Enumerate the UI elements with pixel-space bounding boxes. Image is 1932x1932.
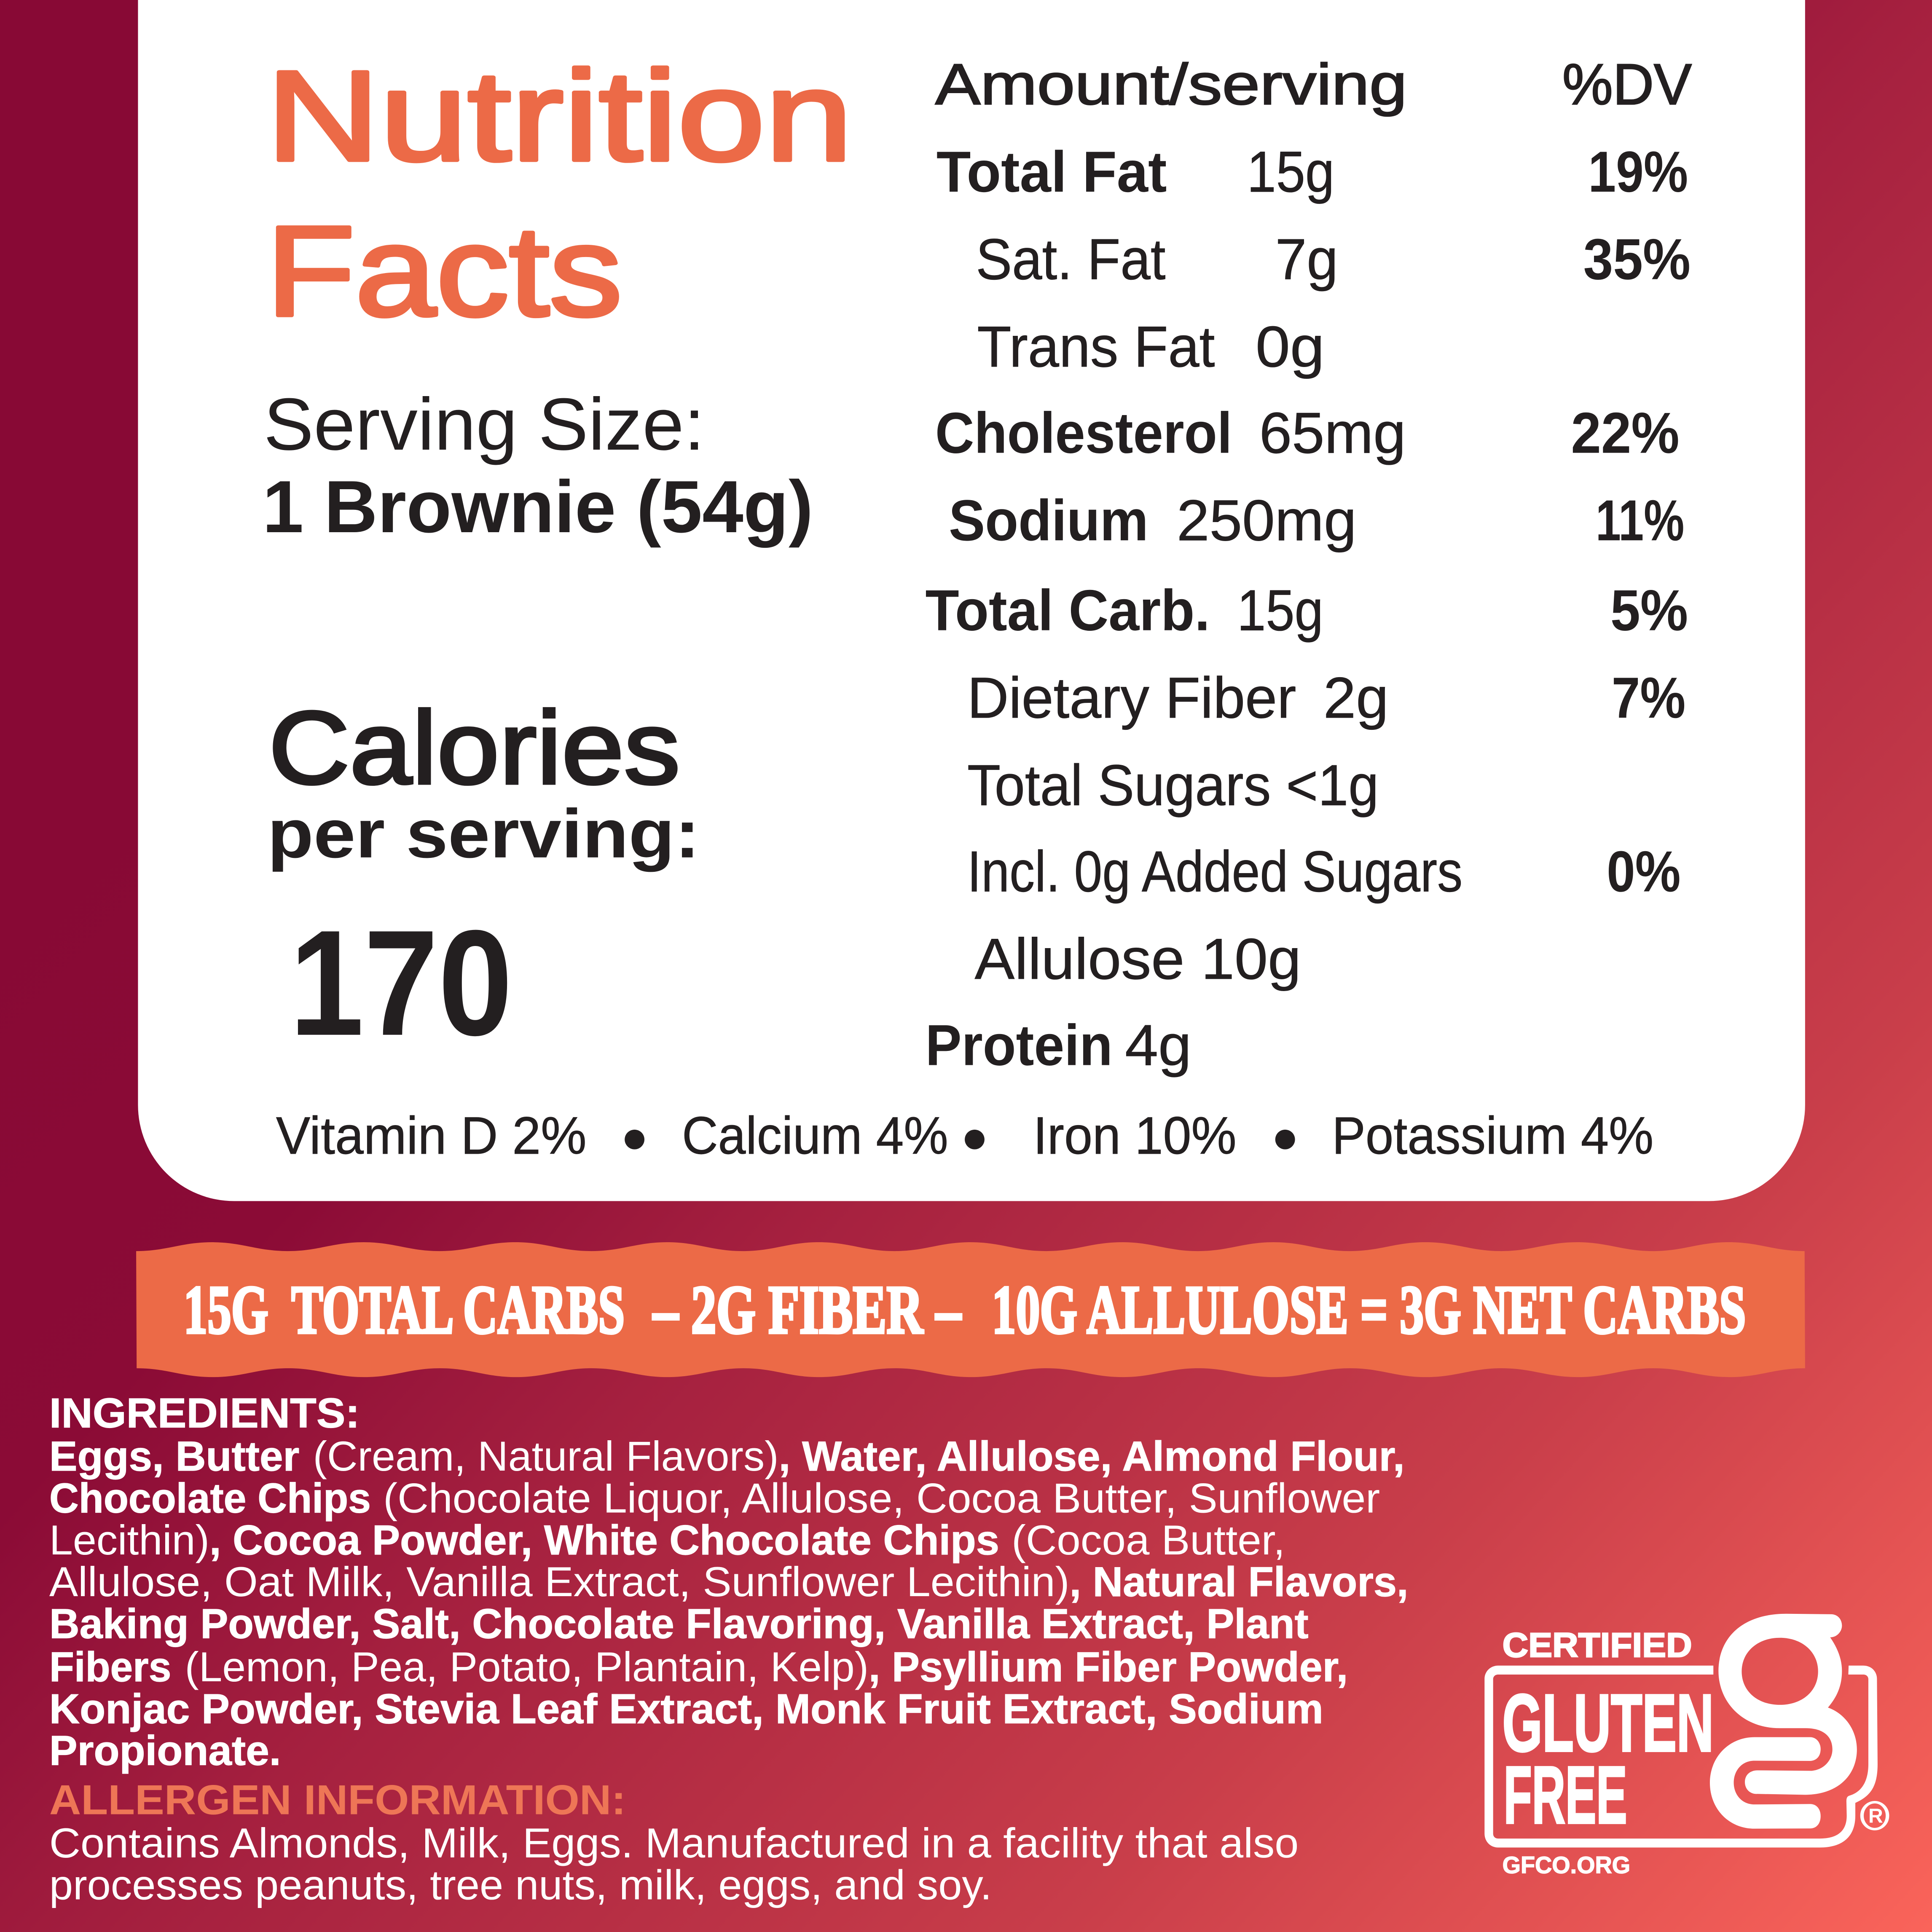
row: saturated fat: 7g bbox=[1275, 227, 1338, 292]
text block: allergen information: Contains Almonds, Milk, Eggs. Manufactured in a facility that also bbox=[49, 1820, 1299, 1867]
panel: nutrition card bbox=[138, 0, 1805, 1201]
text: serving size bbox=[263, 383, 813, 548]
text block: ingredients: Allulose, Oat Milk, Vanilla Extract, Sunflower Lecithin) bbox=[49, 1559, 1070, 1605]
text block: ingredients: INGREDIENTS: bbox=[49, 1390, 360, 1437]
text: vitamins and minerals: Vitamin D 2% bbox=[276, 1106, 587, 1165]
row: sodium bbox=[949, 488, 1684, 553]
row: total fat: Total Fat bbox=[936, 140, 1167, 204]
row: protein: 4g bbox=[1125, 1013, 1191, 1078]
row: allulose: Allulose 10g bbox=[974, 927, 1301, 991]
row: cholesterol: 65mg bbox=[1259, 401, 1406, 466]
row: dietary fiber: 7% bbox=[1612, 666, 1685, 730]
text: calories per serving: per serving: bbox=[267, 795, 700, 872]
icon: certified gluten free logo: CERTIFIED bbox=[1503, 1626, 1692, 1664]
text block: allergen information bbox=[49, 1777, 1299, 1908]
text block: ingredients bbox=[49, 1390, 1409, 1774]
text block: ingredients: , Natural Flavors, bbox=[1070, 1559, 1409, 1605]
text block: ingredients: , Water, Allulose, Almond Flour, bbox=[779, 1433, 1405, 1480]
banner: net carbs bbox=[136, 1242, 1805, 1377]
icon: certified gluten free logo: FREE bbox=[1504, 1750, 1627, 1841]
text: calories per serving bbox=[267, 690, 700, 1067]
text block: ingredients: (Lemon, Pea, Potato, Plantain, Kelp) bbox=[185, 1644, 869, 1691]
row: cholesterol bbox=[935, 401, 1680, 466]
title: Nutrition Facts: Facts bbox=[266, 200, 622, 343]
row: sodium: 250mg bbox=[1177, 488, 1357, 553]
text block: ingredients: Propionate. bbox=[49, 1728, 281, 1774]
text block: ingredients: Lecithin) bbox=[49, 1517, 209, 1564]
text block: allergen information: ALLERGEN INFORMATION: bbox=[49, 1777, 626, 1824]
title: Nutrition Facts: Nutrition bbox=[266, 45, 853, 188]
text block: ingredients: , Cocoa Powder, White Chocolate Chips bbox=[209, 1517, 999, 1564]
row: trans fat: 0g bbox=[1256, 315, 1325, 379]
text block: ingredients: Baking Powder, Salt, Chocolate Flavoring, Vanilla Extract, Plant bbox=[49, 1601, 1309, 1648]
text: serving size: 1 Brownie (54g) bbox=[263, 466, 813, 548]
row: sodium: Sodium bbox=[949, 488, 1148, 553]
row: total fat bbox=[936, 140, 1688, 204]
text block: ingredients: Chocolate Chips bbox=[49, 1475, 371, 1522]
icon: certified gluten free logo: GFCO.ORG bbox=[1503, 1852, 1630, 1878]
text: vitamins and minerals: Potassium 4% bbox=[1332, 1106, 1653, 1165]
row: sodium: 11% bbox=[1596, 488, 1684, 553]
text: calories per serving: Calories bbox=[268, 690, 680, 806]
text: serving size: Serving Size: bbox=[264, 383, 705, 466]
text: vitamins and minerals bbox=[276, 1106, 1653, 1165]
row: trans fat: Trans Fat bbox=[977, 315, 1215, 379]
text: calories per serving: 170 bbox=[290, 899, 513, 1067]
row: header: Amount/serving bbox=[935, 52, 1407, 117]
row: added sugars: 0% bbox=[1607, 839, 1681, 904]
row: saturated fat bbox=[976, 227, 1690, 292]
row: total fat: 15g bbox=[1247, 140, 1334, 204]
title: Nutrition Facts bbox=[266, 45, 853, 343]
row: total carbohydrate bbox=[926, 579, 1688, 643]
icon: certified gluten free logo: R bbox=[1868, 1805, 1883, 1827]
text block: ingredients: (Cocoa Butter, bbox=[1012, 1517, 1285, 1564]
text block: allergen information: processes peanuts, tree nuts, milk, eggs, and soy. bbox=[49, 1862, 992, 1908]
text block: ingredients: Fibers bbox=[49, 1644, 171, 1691]
text block: ingredients: Konjac Powder, Stevia Leaf Extract, Monk Fruit Extract, Sodium bbox=[49, 1685, 1323, 1732]
text: net carbs equation bbox=[184, 1272, 1746, 1348]
text block: ingredients: Eggs, Butter bbox=[49, 1433, 299, 1480]
row: added sugars: Incl. 0g Added Sugars bbox=[967, 839, 1462, 904]
text: net carbs equation: 15G TOTAL CARBS bbox=[184, 1272, 625, 1348]
text block: ingredients: (Chocolate Liquor, Allulose, Cocoa Butter, Sunflower bbox=[383, 1475, 1380, 1522]
text: vitamins and minerals: Calcium 4% bbox=[682, 1106, 948, 1165]
row: total fat: 19% bbox=[1588, 140, 1688, 204]
row: saturated fat: Sat. Fat bbox=[976, 227, 1166, 292]
row: saturated fat: 35% bbox=[1583, 227, 1690, 292]
row: total carbohydrate: 15g bbox=[1237, 579, 1323, 643]
row: protein: Protein bbox=[926, 1013, 1113, 1078]
row: dietary fiber: 2g bbox=[1323, 666, 1389, 730]
row: header bbox=[935, 52, 1692, 117]
row: total carbohydrate: 5% bbox=[1610, 579, 1688, 643]
row: cholesterol: Cholesterol bbox=[935, 401, 1232, 466]
table: nutrient amounts bbox=[926, 52, 1692, 1078]
text block: ingredients: (Cream, Natural Flavors) bbox=[313, 1433, 779, 1480]
row: total sugars: Total Sugars <1g bbox=[967, 753, 1379, 818]
text block: ingredients: , Psyllium Fiber Powder, bbox=[869, 1644, 1348, 1691]
row: dietary fiber bbox=[967, 666, 1685, 730]
icon: certified gluten free logo bbox=[1484, 1614, 1887, 1878]
row: cholesterol: 22% bbox=[1571, 401, 1680, 466]
row: dietary fiber: Dietary Fiber bbox=[967, 666, 1296, 730]
text: vitamins and minerals: Iron 10% bbox=[1033, 1106, 1237, 1165]
text: net carbs equation: – 2G FIBER – bbox=[652, 1272, 961, 1348]
row: header: %DV bbox=[1562, 52, 1692, 117]
row: total carbohydrate: Total Carb. bbox=[926, 579, 1210, 643]
